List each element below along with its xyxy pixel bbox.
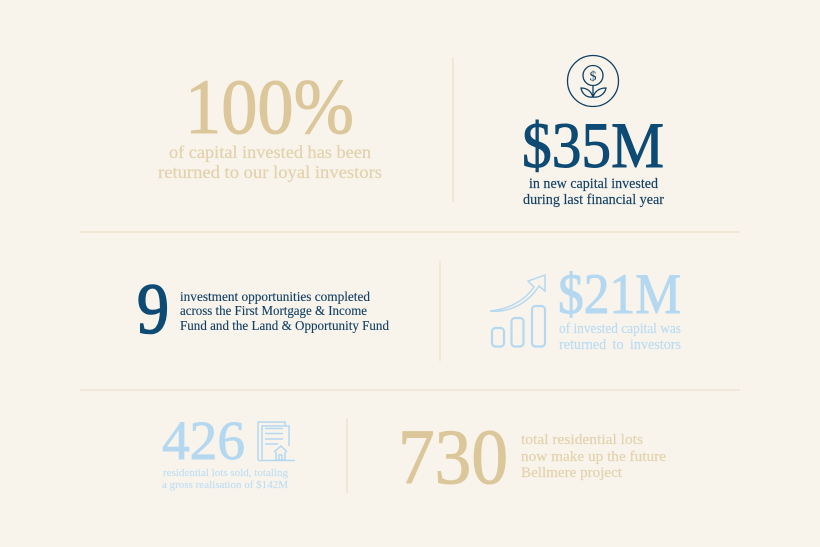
caption: lots sold: residential lots sold, totaling <box>163 467 288 479</box>
icon: money flower: $ <box>590 70 596 84</box>
panel: 730 total lots <box>398 413 666 500</box>
caption: total lots: Bellmere project <box>521 465 623 481</box>
caption: invested capital returned: returned to investors <box>559 337 681 353</box>
caption: investment opportunities <box>180 289 389 333</box>
panel: 100% capital returned <box>158 63 382 182</box>
panel: $35M new capital <box>522 56 664 208</box>
caption: new capital: in new capital invested <box>529 176 658 192</box>
caption: capital returned: returned to our loyal investors <box>158 162 382 182</box>
caption: new capital: during last financial year <box>523 192 664 208</box>
statistic: 730: 730 <box>398 413 508 500</box>
panel: 9 investment opportunities <box>137 269 389 349</box>
caption: investment opportunities: investment opportunities completed <box>180 289 370 304</box>
caption: lots sold: a gross realisation of $142M <box>162 479 288 491</box>
statistic: 9: 9 <box>137 269 169 349</box>
icon: growth chart with arrow <box>490 275 545 346</box>
caption: total lots: total residential lots <box>521 432 643 448</box>
statistic: $21M: $21M <box>558 263 681 326</box>
caption: capital returned <box>158 142 382 182</box>
caption: lots sold <box>162 467 288 491</box>
caption: new capital <box>523 176 664 208</box>
caption: total lots <box>521 432 666 481</box>
caption: invested capital returned: of invested capital was <box>559 321 681 337</box>
statistic: 100%: 100% <box>185 63 354 150</box>
icon: document with house <box>258 422 295 460</box>
statistic: 426: 426 <box>162 410 245 471</box>
caption: total lots: now make up the future <box>521 449 666 465</box>
caption: investment opportunities: across the First Mortgage & Income <box>180 303 367 318</box>
statistic: $35M: $35M <box>522 110 664 182</box>
caption: invested capital returned <box>559 321 681 353</box>
caption: capital returned: of capital invested has been <box>169 142 371 162</box>
caption: investment opportunities: Fund and the Land & Opportunity Fund <box>180 318 389 333</box>
icon: money flower <box>568 56 618 106</box>
panel: 426 lots sold <box>162 410 295 491</box>
panel: $21M returned <box>490 263 681 353</box>
